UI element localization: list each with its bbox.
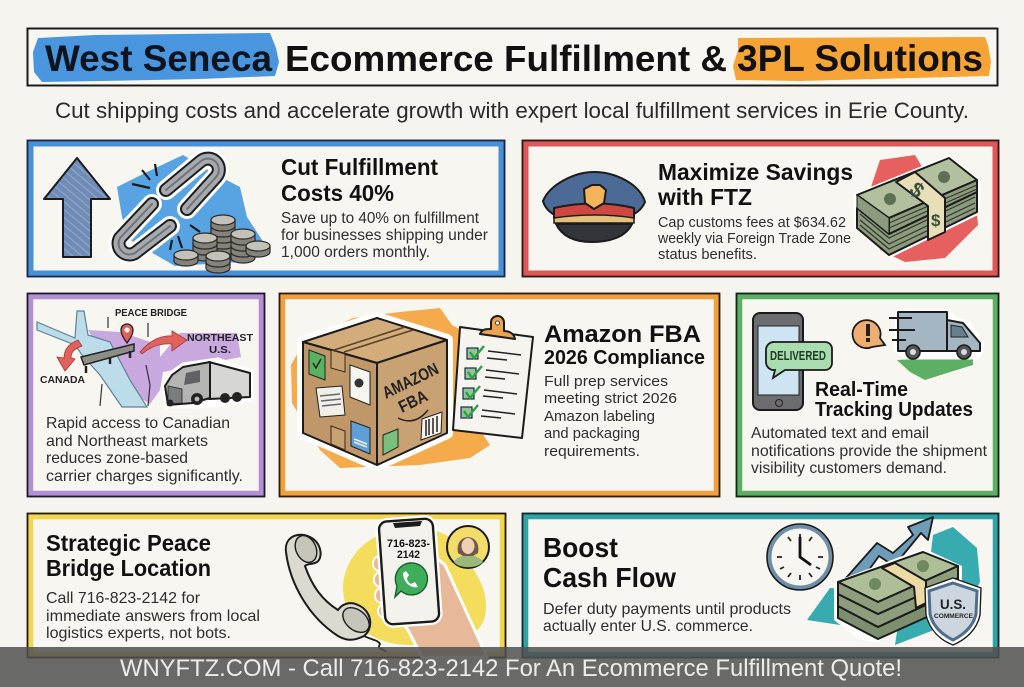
body text: Defer duty payments until products	[543, 601, 791, 618]
body text: weekly via Foreign Trade Zone	[657, 230, 851, 247]
title banner: West Seneca	[45, 38, 272, 79]
green splash	[897, 356, 973, 380]
subheading: 2026 Compliance	[544, 347, 705, 369]
panel: real-time tracking	[736, 294, 998, 496]
icon: up arrow	[44, 158, 110, 257]
body text: carrier charges significantly.	[46, 468, 243, 485]
panel: boost cash flow	[522, 514, 998, 658]
phone number on screen: 716-823-	[387, 538, 430, 550]
icon: hand holding phone	[373, 518, 487, 657]
bridge	[81, 344, 134, 373]
yellow splash	[343, 528, 486, 645]
icon: amazon cardboard box	[303, 318, 447, 465]
footer banner: WNYFTZ.COM - Call 716-823-2142 For An Ecommerce Fulfillment Quote!	[120, 655, 902, 682]
body text: visibility customers demand.	[751, 460, 947, 477]
heading: Bridge Location	[46, 555, 211, 581]
body text: reduces zone-based	[46, 450, 188, 467]
body text: and Northeast markets	[46, 433, 208, 450]
heading: with FTZ	[657, 184, 752, 210]
map label: PEACE BRIDGE	[115, 307, 187, 319]
icon: broken chain and coins	[117, 155, 270, 273]
title banner: 3PL Solutions	[737, 38, 983, 79]
heading: Amazon FBA	[544, 321, 701, 348]
body text: notifications provide the shipment	[751, 443, 988, 460]
orange brush splash	[291, 308, 490, 468]
heading: Costs 40%	[281, 180, 394, 206]
body text: Save up to 40% on fulfillment	[281, 210, 480, 227]
heading: Real-Time	[815, 379, 908, 401]
icon: wall clock	[767, 524, 833, 590]
footer banner	[0, 647, 1024, 687]
body text: Amazon labeling	[544, 408, 655, 425]
icon: stack of cash: $	[905, 178, 929, 203]
icon: telephone handset	[286, 532, 386, 652]
body text: logistics experts, not bots.	[46, 625, 231, 642]
icon: support agent avatar	[447, 526, 489, 568]
icon: truck	[165, 360, 251, 406]
body text: requirements.	[544, 443, 640, 460]
box printed text: AMAZON	[379, 359, 442, 403]
body text: Full prep services	[544, 373, 668, 390]
icon: arrow to northeast	[140, 331, 187, 354]
icon: U.S. commerce shield	[925, 578, 981, 645]
icon: customs officer hat	[543, 172, 645, 242]
heading: Strategic Peace	[46, 530, 211, 556]
phone number on screen: 2142	[397, 549, 420, 561]
panel: cut fulfillment costs	[28, 140, 504, 276]
box printed text: FBA	[395, 386, 431, 417]
icon: rising arrow	[846, 517, 933, 585]
title banner	[28, 28, 998, 86]
body text: Rapid access to Canadian	[46, 415, 230, 432]
heading: Cut Fulfillment	[281, 154, 438, 180]
body text: for businesses shipping under	[281, 227, 488, 244]
icon: stack of cash: $	[931, 211, 941, 230]
map label: NORTHEAST	[187, 332, 254, 344]
icon: arrow to Canada	[57, 340, 82, 371]
body text: 1,000 orders monthly.	[281, 244, 430, 261]
map illustration	[37, 311, 251, 407]
panel: strategic peace bridge location	[28, 514, 506, 658]
icon: alert speech bubble	[853, 320, 885, 348]
panel: amazon FBA compliance	[280, 294, 720, 496]
body text: status benefits.	[658, 246, 757, 263]
bubble text: DELIVERED	[770, 349, 826, 363]
panel: maximize savings with FTZ	[522, 140, 998, 276]
title banner: Ecommerce Fulfillment &	[285, 38, 727, 79]
heading: Tracking Updates	[815, 399, 973, 421]
box labels	[309, 350, 442, 455]
body text: meeting strict 2026	[544, 390, 677, 407]
icon: delivery truck	[889, 311, 983, 359]
body text: Cap customs fees at $634.62	[658, 214, 846, 231]
shield text: U.S.	[940, 596, 966, 612]
body text: immediate answers from local	[46, 608, 260, 625]
body text: Automated text and email	[751, 425, 929, 442]
heading: Boost	[543, 532, 618, 563]
panel: peace bridge location map	[28, 294, 264, 496]
body text: actually enter U.S. commerce.	[543, 618, 753, 635]
icon: location pin	[121, 324, 133, 343]
icon: whatsapp logo	[395, 563, 428, 597]
icon: stack of cash	[834, 548, 962, 642]
body text: and packaging	[544, 425, 640, 442]
map label: U.S.	[209, 344, 231, 356]
shield text: COMMERCE	[934, 613, 974, 620]
icon: smartphone with delivered bubble	[753, 313, 832, 410]
teal splashes	[807, 527, 980, 645]
heading: Maximize Savings	[658, 159, 853, 185]
icon: checklist clipboard	[453, 316, 533, 438]
icon: stack of cash	[853, 155, 981, 262]
body text: Call 716-823-2142 for	[46, 590, 201, 607]
subtitle: Cut shipping costs and accelerate growth with expert local fulfillment services in Erie County.	[55, 98, 969, 123]
map label: CANADA	[40, 374, 85, 386]
heading: Cash Flow	[543, 562, 676, 593]
